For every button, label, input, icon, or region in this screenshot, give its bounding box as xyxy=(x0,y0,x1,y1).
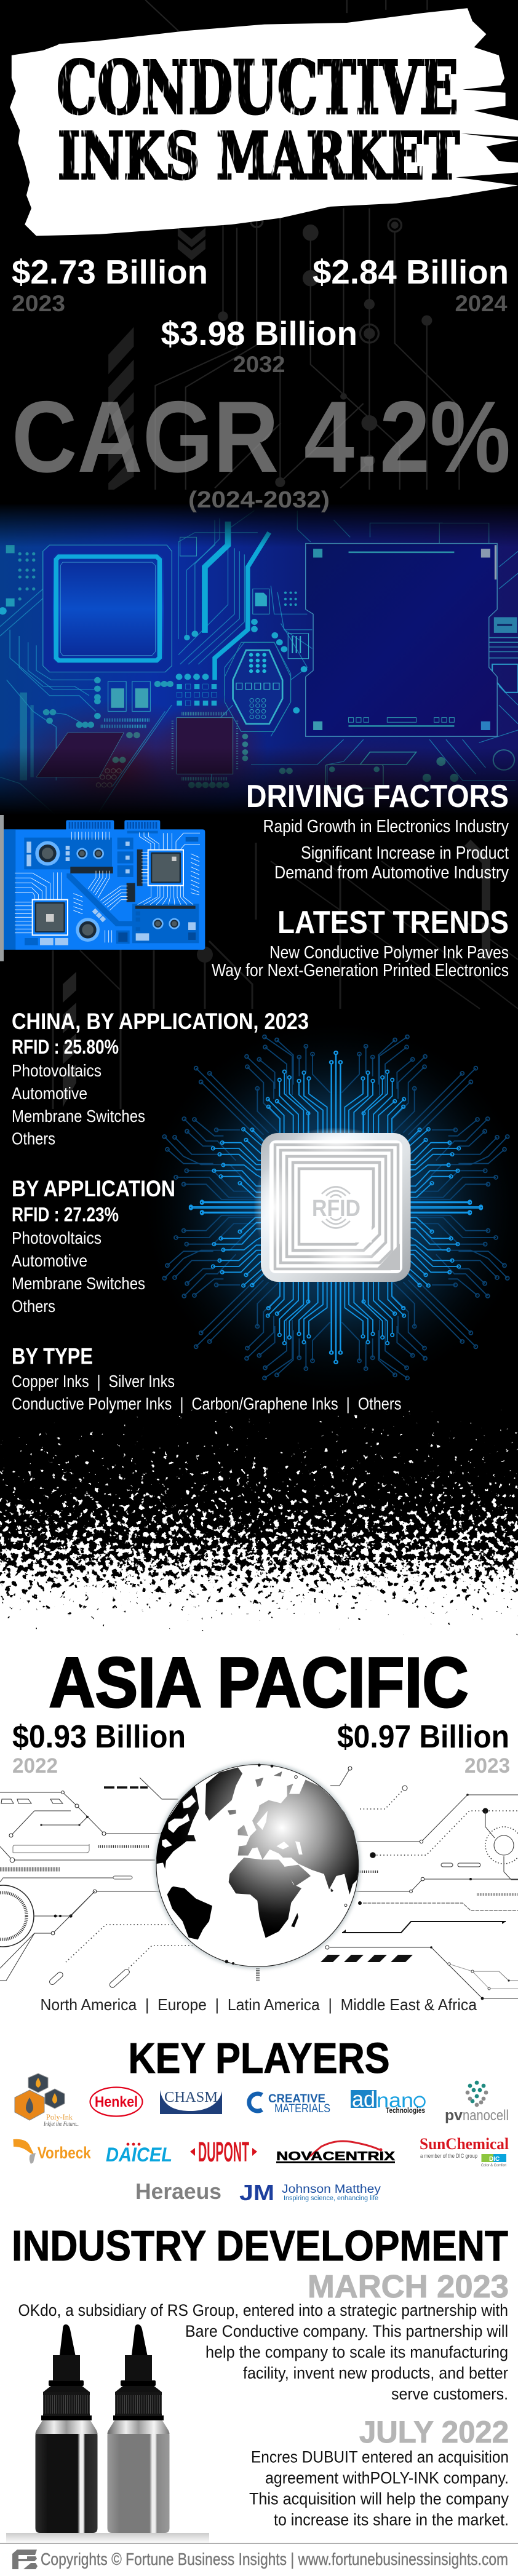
text: latest trends xyxy=(212,905,509,980)
footer xyxy=(0,2543,518,2569)
logo: Sun Chemical: SunChemical xyxy=(420,2135,509,2153)
right large chip xyxy=(306,544,497,736)
black bottle xyxy=(36,2324,97,2533)
silver chip xyxy=(253,1127,411,1282)
illustration: RFID chip with radial traces xyxy=(139,1017,518,1398)
logo: Johnson Matthey: Inspiring science, enhancing life xyxy=(284,2195,378,2202)
metal bracket xyxy=(0,815,12,961)
logo: adnano Technologies: nan xyxy=(377,2089,413,2112)
logo: NovaCentrix: NOVACENTRIX xyxy=(276,2150,396,2163)
white traces xyxy=(15,832,200,942)
logo: Vorbeck: Vorbeck xyxy=(38,2144,92,2162)
segment list: Photovoltaics xyxy=(12,1061,102,1080)
circuit lines right of globe xyxy=(258,1767,518,2000)
logo: CHASM xyxy=(160,2089,222,2114)
capacitors xyxy=(101,682,150,726)
illustration: blue PCB card xyxy=(0,815,205,961)
type list xyxy=(12,1372,401,1413)
logo: Poly-Ink: Inkjet the Future.. xyxy=(43,2121,79,2127)
text: by application xyxy=(12,1176,175,1316)
type list: Copper Inks | Silver Inks xyxy=(12,1372,175,1391)
description xyxy=(18,2301,508,2403)
white brush stroke xyxy=(10,8,518,236)
logo: adnano Technologies: Technologies xyxy=(386,2107,425,2115)
stat: 2024: $2.84 Billion xyxy=(313,253,509,291)
logo: Henkel xyxy=(90,2088,143,2116)
title text xyxy=(57,45,460,194)
thick cyan traces xyxy=(0,522,307,763)
logo: Poly-Ink: Poly-Ink xyxy=(46,2112,73,2121)
type list: Conductive Polymer Inks | Carbon/Graphene Inks | Others xyxy=(12,1394,401,1413)
highlight value: RFID : 25.80% xyxy=(12,1036,119,1058)
logo: Sun Chemical: Color & Comfort xyxy=(481,2163,506,2168)
RFID label: RFID xyxy=(312,1196,361,1222)
logo: pvnanocell: pv xyxy=(445,2107,463,2124)
illustration: ink bottles xyxy=(6,2324,209,2543)
text: China by application xyxy=(12,1009,309,1148)
octagon module xyxy=(225,642,291,732)
heading: BY TYPE xyxy=(12,1343,93,1369)
date: MARCH 2023 xyxy=(308,2269,509,2305)
logo: Sun Chemical: DIC xyxy=(489,2156,500,2163)
logo: Poly-Ink xyxy=(15,2073,79,2127)
stat: 2022: 2022 xyxy=(12,1754,58,1778)
date: JULY 2022 xyxy=(359,2415,509,2449)
logo: Henkel: Henkel xyxy=(95,2094,138,2110)
stat: 2024 xyxy=(313,253,509,316)
panel: company logos xyxy=(14,2073,509,2205)
main chip xyxy=(43,545,172,672)
stat: 2032: 2032 xyxy=(233,352,285,377)
stat: 2023 xyxy=(12,253,208,316)
highlight value: RFID : 27.23% xyxy=(12,1203,119,1225)
logo: Creative Materials: MATERIALS xyxy=(274,2102,330,2115)
region list: North America | Europe | Latin America | Middle East & Africa xyxy=(41,1995,477,2014)
segment list: Photovoltaics xyxy=(12,1228,102,1247)
icon: globe xyxy=(154,1762,361,1969)
icon: company mark xyxy=(12,2550,38,2569)
small components xyxy=(96,523,518,788)
heading: CHINA, BY APPLICATION, 2023 xyxy=(12,1009,309,1034)
stat: 2024: 2024 xyxy=(455,291,508,316)
segment list xyxy=(12,1061,145,1148)
logo: Creative Materials xyxy=(249,2093,330,2115)
panel: blue circuit board illustration xyxy=(0,504,518,843)
logo: Johnson Matthey: Johnson Matthey xyxy=(282,2183,381,2196)
segment list xyxy=(12,1228,145,1316)
RFID label xyxy=(312,1187,361,1228)
board components xyxy=(26,837,198,945)
segment list: Automotive xyxy=(12,1084,87,1103)
traces left of main chip xyxy=(0,511,518,824)
lower chip xyxy=(36,714,237,779)
development: March 2023 xyxy=(18,2269,509,2403)
driving factor 2 xyxy=(274,843,509,883)
logo: Sun Chemical: a member of the DIC group xyxy=(420,2153,477,2160)
logo: CHASM: CHASM xyxy=(164,2089,218,2105)
silver bottle xyxy=(107,2324,170,2533)
segment list: Membrane Switches xyxy=(12,1107,145,1126)
heading: key players: KEY PLAYERS xyxy=(128,2034,390,2082)
stat: 2022 xyxy=(12,1719,186,1778)
title banner xyxy=(10,8,518,236)
stat: 2023 xyxy=(337,1719,510,1778)
text: by type xyxy=(12,1343,401,1413)
segment list: Others xyxy=(12,1129,55,1148)
logo: Johnson Matthey xyxy=(239,2180,381,2205)
trend copy xyxy=(212,943,509,980)
logo: Sun Chemical xyxy=(420,2135,509,2168)
logo: Creative Materials: CREATIVE xyxy=(268,2093,325,2105)
development: July 2022 xyxy=(249,2415,509,2529)
market size stats xyxy=(12,253,511,513)
CAGR period: (2024-2032) xyxy=(188,487,330,513)
ink splatter transition xyxy=(0,1409,518,1673)
logo: Vorbeck xyxy=(14,2139,92,2164)
segment list: Automotive xyxy=(12,1251,87,1270)
dot grid left xyxy=(18,552,35,600)
background: faint circuit lines behind lower text xyxy=(53,843,518,1109)
regional heading xyxy=(12,1644,510,1778)
text: driving factors xyxy=(246,779,509,883)
logo: DuPont xyxy=(190,2136,257,2168)
description: serve customers. xyxy=(391,2385,508,2403)
logo: DuPont: DUPONT xyxy=(198,2136,249,2168)
segment list: Membrane Switches xyxy=(12,1274,145,1293)
description xyxy=(249,2448,509,2529)
stat: 2023: $2.73 Billion xyxy=(12,253,208,291)
heading: BY APPLICATION xyxy=(12,1176,175,1201)
stat: 2022: $0.93 Billion xyxy=(12,1719,186,1755)
circuit lines left of globe xyxy=(0,1778,195,1989)
white page area xyxy=(0,1661,518,2576)
logo: adnano Technologies xyxy=(351,2086,425,2115)
stat: 2032: $3.98 Billion xyxy=(161,314,357,352)
darker zones xyxy=(24,831,199,945)
stat: 2023: 2023 xyxy=(464,1754,510,1778)
logo: adnano Technologies: ad xyxy=(352,2086,375,2112)
logo: pvnanocell: nanocell xyxy=(463,2107,509,2124)
microchips xyxy=(33,850,183,935)
top connectors xyxy=(66,820,160,830)
logo: pvnanocell xyxy=(445,2081,509,2124)
logo: NovaCentrix xyxy=(276,2141,396,2163)
square grid xyxy=(177,684,217,706)
segment list: Others xyxy=(12,1297,55,1316)
radiating traces xyxy=(162,1035,509,1380)
board xyxy=(4,829,205,950)
background: dark circuit lines behind headline stats xyxy=(108,0,459,490)
logo: Daicel: DAICEL xyxy=(106,2144,172,2166)
logo: Heraeus: Heraeus xyxy=(135,2179,221,2204)
panel fade to black xyxy=(0,503,518,837)
stat: 2032 xyxy=(161,314,357,377)
logo: Johnson Matthey: JM xyxy=(239,2180,274,2205)
Asia Pacific title: ASIA PACIFIC xyxy=(49,1644,469,1722)
stat: 2023: 2023 xyxy=(12,291,65,316)
